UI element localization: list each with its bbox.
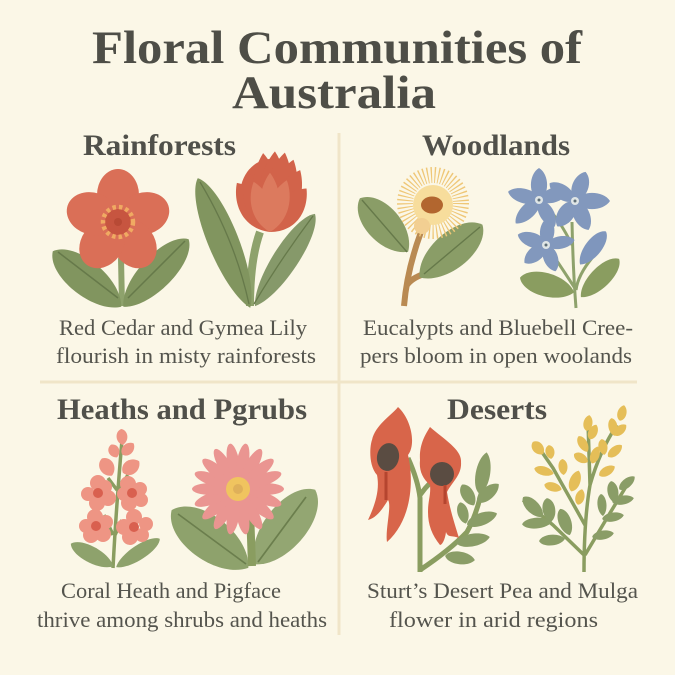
- icon: bluebell creeper: [506, 168, 626, 308]
- caption: rainforests: Red Cedar and Gymea Lily: [59, 315, 307, 340]
- caption: woodlands: Eucalypts and Bluebell Cree-: [363, 315, 633, 340]
- heading: woodlands: Woodlands: [422, 129, 570, 162]
- icon: red cedar flower: [42, 169, 200, 320]
- panel: rainforests: [42, 129, 326, 368]
- caption: woodlands: pers bloom in open woolands: [360, 343, 632, 368]
- caption: heaths: [37, 578, 327, 632]
- caption: heaths: thrive among shrubs and heaths: [37, 607, 327, 632]
- caption: deserts: Sturt’s Desert Pea and Mulga: [367, 578, 638, 603]
- caption: deserts: flower in arid regions: [389, 607, 598, 632]
- icon: eucalypt flower: [347, 175, 494, 306]
- panel: heaths and shrubs: [37, 393, 331, 632]
- caption: rainforests: [56, 315, 316, 368]
- icon: pigface: [159, 443, 331, 585]
- caption: deserts: [367, 578, 638, 632]
- heading: deserts: Deserts: [447, 393, 547, 426]
- icon: mulga: [519, 404, 638, 572]
- heading: rainforests: Rainforests: [83, 129, 236, 162]
- title: Floral Communities of: [92, 22, 583, 74]
- title: Australia: [232, 67, 436, 119]
- panel: deserts: [367, 393, 638, 632]
- icon: gymea lily: [184, 150, 326, 314]
- heading: heaths: Heaths and Pgrubs: [57, 393, 307, 426]
- icon: sturt's desert pea: [368, 407, 503, 572]
- caption: heaths: Coral Heath and Pigface: [61, 578, 281, 603]
- icon: coral heath: [67, 429, 164, 573]
- panel: woodlands: [347, 129, 633, 368]
- title: [92, 22, 583, 119]
- caption: woodlands: [360, 315, 633, 368]
- caption: rainforests: flourish in misty rainforests: [56, 343, 316, 368]
